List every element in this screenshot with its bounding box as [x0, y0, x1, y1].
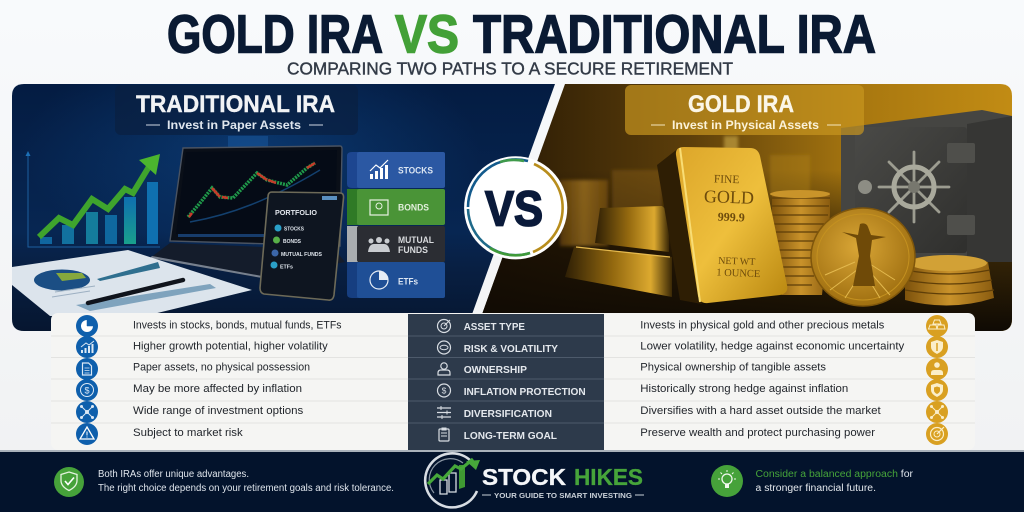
row: risk, gold: [640, 336, 948, 358]
row: inflation, traditional: $: [84, 385, 90, 395]
gold bar: fine gold: NET WT: [718, 256, 755, 268]
heading panel: traditional IRA: TRADITIONAL IRA: [136, 91, 335, 118]
block: bonds: BONDS: [398, 202, 429, 214]
heading panel: gold IRA: [625, 85, 864, 135]
title: TRADITIONAL IRA: [473, 4, 876, 64]
block: mutual funds: FUNDS: [398, 245, 428, 256]
gold bar: fine gold: 1 OUNCE: [716, 268, 761, 280]
row label: inflation protection: $: [442, 386, 447, 396]
footer text left: Both IRAs offer unique advantages.: [98, 469, 249, 480]
title: GOLD IRA: [167, 4, 383, 64]
heading panel: gold IRA: Invest in Physical Assets: [672, 118, 819, 132]
panel: gold IRA: [470, 84, 1015, 331]
row: asset type, gold: Invests in physical gold and other precious metals: [640, 320, 885, 332]
row label: diversification: DIVERSIFICATION: [464, 408, 552, 420]
row: ownership, gold: Physical ownership of tangible assets: [640, 362, 827, 374]
logo: stock hikes: YOUR GUIDE TO SMART INVESTING: [494, 491, 632, 500]
phone: portfolio: ETFs: [280, 264, 293, 270]
footer text left: [98, 469, 394, 494]
footer text right: [756, 469, 914, 494]
row: asset type, traditional: [76, 315, 342, 337]
row: ownership, gold: [640, 358, 948, 380]
gold bar: fine gold: 999.9: [718, 210, 745, 225]
gold IRA column: [640, 315, 948, 445]
row: risk, traditional: Higher growth potential, higher volatility: [133, 340, 328, 352]
row: risk, traditional: [76, 336, 328, 358]
block: ETFs: [347, 262, 445, 298]
footer text right: a stronger financial future.: [756, 483, 876, 494]
row label: ownership: [438, 363, 527, 376]
row: ownership, traditional: Paper assets, no physical possession: [133, 362, 310, 374]
logo: stock hikes: [425, 453, 644, 507]
subtitle: COMPARING TWO PATHS TO A SECURE RETIREMENT: [287, 58, 733, 78]
gold bar: fine gold: [657, 147, 787, 304]
row label: ownership: OWNERSHIP: [464, 364, 527, 376]
gold bar: fine gold: FINE: [714, 173, 740, 186]
phone: portfolio: STOCKS: [284, 226, 304, 232]
title: VS: [395, 4, 459, 64]
row: inflation, gold: Historically strong hedge against inflation: [640, 383, 848, 395]
table centre column: [408, 314, 604, 450]
row: risk, gold: Lower volatility, hedge against economic uncertainty: [640, 340, 905, 352]
row: goal, gold: Preserve wealth and protect purchasing power: [640, 427, 875, 439]
block: ETFs: ETFs: [398, 276, 418, 288]
row: inflation, traditional: [76, 379, 302, 401]
blurred background stack: [560, 136, 810, 246]
row: inflation, gold: [640, 379, 948, 401]
traditional IRA column: [76, 315, 342, 445]
gold bar: fine gold: GOLD: [704, 186, 754, 208]
block: mutual funds: MUTUAL: [398, 235, 434, 246]
phone: portfolio: BONDS: [283, 239, 301, 245]
small gold bars: [565, 206, 672, 297]
block: stocks: STOCKS: [398, 166, 433, 176]
row: asset type, gold: [640, 315, 948, 337]
logo: stock hikes: STOCK: [482, 464, 566, 490]
row: goal, gold: [640, 423, 948, 445]
VS badge: VS: [485, 182, 543, 236]
icon: light bulb: [711, 465, 743, 497]
footer band: [0, 450, 1024, 512]
row: asset type, traditional: Invests in stocks, bonds, mutual funds, ETFs: [133, 320, 342, 332]
row: diversification, traditional: Wide range of investment options: [133, 405, 304, 417]
logo emblem: [425, 453, 480, 507]
bar chart with rising arrow: [26, 151, 160, 247]
safe: [841, 110, 1012, 262]
row label: long-term goal: [439, 428, 558, 442]
block: stocks: [347, 152, 445, 188]
heading panel: traditional IRA: [115, 85, 358, 135]
row: diversification, traditional: [76, 401, 304, 423]
row: goal, traditional: [76, 423, 243, 445]
row label: inflation protection: [438, 384, 586, 398]
row label: risk and volatility: RISK & VOLATILITY: [464, 343, 558, 355]
phone: portfolio: MUTUAL FUNDS: [281, 252, 322, 258]
logo: stock hikes: HIKES: [574, 464, 643, 490]
heading panel: traditional IRA: Invest in Paper Assets: [167, 118, 301, 132]
row: ownership, traditional: [76, 358, 310, 380]
liberty gold coin: [811, 208, 915, 306]
row: goal, traditional: Subject to market risk: [133, 427, 243, 439]
row: diversification, gold: Diversifies with a hard asset outside the market: [640, 405, 881, 417]
panel: traditional IRA: [12, 84, 555, 331]
phone: portfolio: [260, 192, 344, 300]
row: inflation, traditional: May be more affected by inflation: [133, 383, 302, 395]
comparison table: [51, 313, 975, 450]
coin stack: [770, 190, 830, 295]
VS badge: [464, 156, 567, 259]
row label: risk and volatility: [438, 341, 558, 355]
block: mutual funds: [347, 226, 445, 262]
small coin stack: [905, 255, 994, 306]
row label: asset type: [438, 320, 525, 333]
laptop with trading chart: [150, 146, 345, 278]
row: diversification, gold: [640, 401, 948, 423]
stacked blocks: asset types: [347, 152, 445, 298]
icon: shield check: [54, 467, 84, 497]
row label: asset type: ASSET TYPE: [464, 321, 525, 333]
row label: inflation protection: INFLATION PROTECTION: [464, 386, 586, 398]
phone: portfolio: PORTFOLIO: [275, 208, 317, 217]
heading panel: gold IRA: GOLD IRA: [688, 91, 794, 118]
footer text right: Consider a balanced approach for: [756, 469, 914, 480]
row label: long-term goal: LONG-TERM GOAL: [464, 430, 558, 442]
paper report with pie chart: [12, 250, 252, 316]
row label: diversification: [437, 406, 552, 420]
footer text left: The right choice depends on your retirement goals and risk tolerance.: [98, 483, 394, 494]
title: [167, 4, 876, 64]
safe wheel: [879, 152, 949, 222]
block: bonds: [347, 189, 445, 225]
pen: [88, 280, 183, 303]
